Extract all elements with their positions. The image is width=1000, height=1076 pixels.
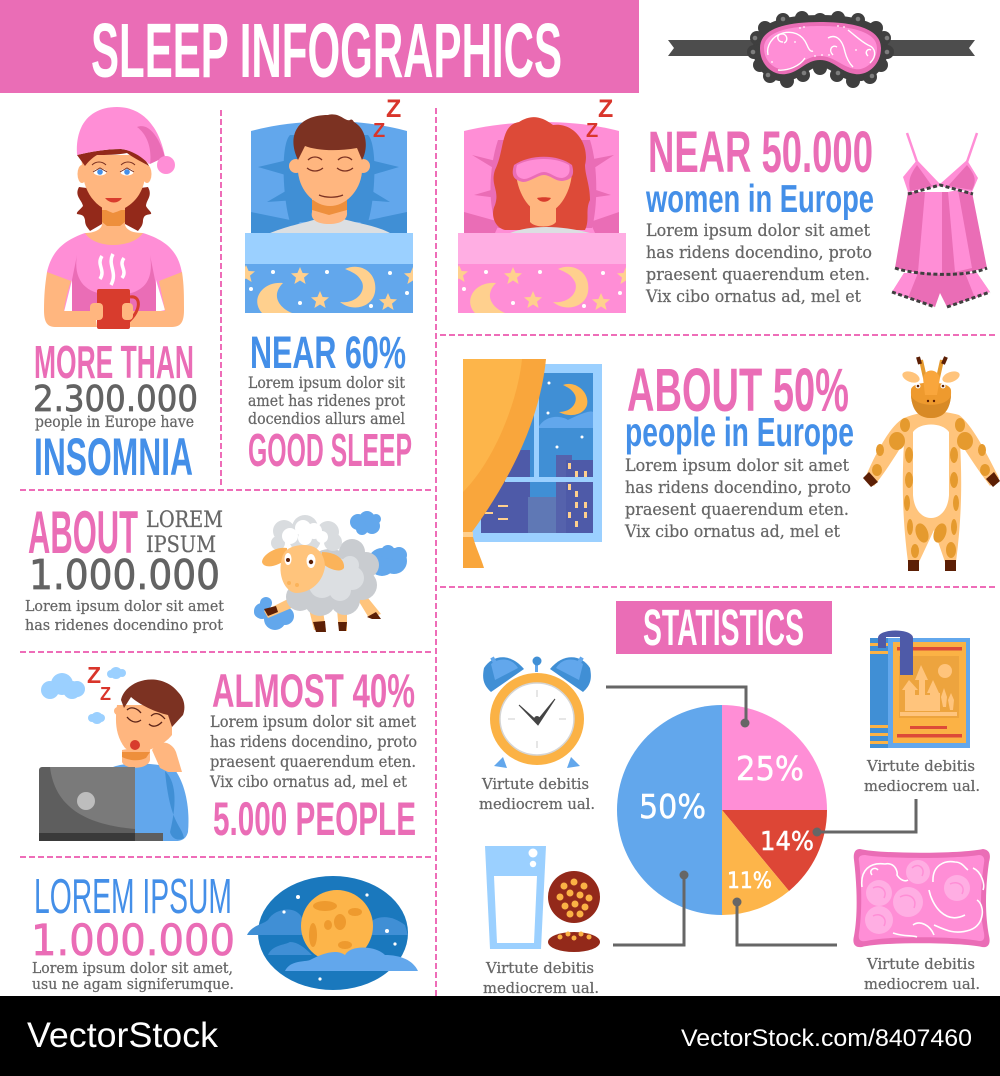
heading: about: ABOUT (28, 499, 138, 566)
label: 14%: 14% (760, 827, 814, 857)
title banner: SLEEP INFOGRAPHICS (91, 8, 562, 94)
text: description: Lorem ipsum dolor sit amet (646, 221, 870, 240)
text: description: praesent quaerendum eten. (646, 265, 870, 284)
panel: near 50.000 women (450, 95, 990, 313)
text: pillow label: mediocrem ual. (864, 977, 980, 993)
number: 1.000.000: 1.000.000 (29, 551, 220, 599)
icon: sheep with clouds (254, 511, 407, 632)
text: lorem ipsum: LOREM (146, 508, 223, 533)
text: description (624, 456, 851, 541)
number: 1.000.000: 1.000.000 (31, 916, 235, 966)
text: milk label: mediocrem ual. (483, 981, 599, 997)
label: 25%: 25% (736, 749, 804, 788)
icon: man sleeping in bed (245, 100, 413, 313)
text: description: has ridens docendino, proto (625, 478, 851, 497)
text: description: praesent quaerendum eten. (625, 500, 849, 519)
icon: giraffe onesie (863, 357, 1000, 571)
icon: man sleeping in bed: Z (373, 120, 385, 142)
text: lorem ipsum (146, 508, 223, 558)
text: lorem ipsum: amet has ridenes prot (248, 392, 406, 410)
footer watermark bar: VectorStock (27, 1016, 219, 1055)
icon: window with curtain (463, 359, 602, 568)
connector: pillow to 11% (732, 898, 837, 945)
text: description: Lorem ipsum dolor sit amet, (32, 961, 233, 977)
text: book label (864, 759, 980, 795)
icon: pink pillow (853, 849, 990, 947)
footer watermark bar (0, 996, 1000, 1076)
text: book label: mediocrem ual. (864, 779, 980, 795)
icon: alarm clock (483, 656, 591, 768)
subheading: women in europe: women in Europe (645, 178, 874, 221)
text: clock label: mediocrem ual. (479, 797, 595, 813)
icon: milk and cookies (485, 846, 600, 952)
icon: moon in night sky (247, 876, 418, 990)
text: clock label (479, 777, 595, 813)
panel: more than 2.300.000 insomnia (33, 107, 198, 487)
text: description: has ridens docendino, proto (646, 243, 872, 262)
icon: sleep mask on ribbon (668, 11, 975, 88)
text: description (25, 597, 224, 634)
icon: tired man with laptop: Z (100, 684, 111, 704)
text: description: praesent quaerendum eten. (210, 753, 416, 771)
subheading: people in europe: people in Europe (625, 409, 854, 455)
text: description: Lorem ipsum dolor sit amet (25, 597, 224, 615)
text: lorem ipsum (248, 374, 406, 428)
panel: about 50% people in europe (463, 356, 1000, 571)
panel: statistics (479, 599, 990, 997)
connector: milk to 50% (613, 870, 688, 945)
icon: woman sleeping with mask (458, 100, 626, 313)
text: description: Vix cibo ornatus ad, mel et (624, 522, 840, 541)
text: people in europe have: people in Europe have (35, 413, 194, 431)
heading: lorem ipsum: LOREM IPSUM (34, 870, 232, 924)
heading: almost 40%: ALMOST 40% (212, 664, 415, 717)
title banner (0, 0, 639, 94)
text: milk label (483, 961, 599, 997)
heading: statistics: STATISTICS (643, 599, 804, 656)
pie chart (617, 705, 827, 915)
text: book label: Virtute debitis (866, 759, 975, 775)
panel: almost 40% 5.000 people (39, 662, 417, 845)
text: pillow label (864, 957, 980, 993)
heading: good sleep: GOOD SLEEP (248, 424, 412, 476)
label: 11%: 11% (727, 869, 772, 894)
label: 50%: 50% (639, 787, 706, 826)
panel: near 60% good sleep (245, 100, 413, 466)
text: pillow label: Virtute debitis (866, 957, 975, 973)
text: description: Lorem ipsum dolor sit amet (625, 456, 849, 475)
icon: pink nightie (892, 133, 990, 307)
icon: woman sleeping with mask: Z (598, 95, 613, 123)
heading: statistics (616, 599, 832, 656)
heading: insomnia: INSOMNIA (34, 428, 193, 487)
icon: man sleeping in bed: Z (386, 95, 401, 123)
icon: woman sleeping with mask: Z (586, 120, 598, 142)
heading: more than: MORE THAN (34, 336, 194, 388)
heading: near 50.000: NEAR 50.000 (648, 120, 873, 185)
icon: tired man with laptop: Z (87, 662, 101, 688)
heading: near 60%: NEAR 60% (250, 327, 406, 378)
text: description (645, 221, 872, 306)
text: lorem ipsum: IPSUM (146, 533, 216, 558)
heading: about 50%: ABOUT 50% (627, 356, 849, 424)
text: description: Vix cibo ornatus ad, mel et (645, 287, 861, 306)
text: description: Vix cibo ornatus ad, mel et (209, 773, 408, 791)
text: clock label: Virtute debitis (481, 777, 589, 793)
icon: tired man with laptop (39, 662, 188, 841)
text: description: usu ne agam signiferumque. (32, 977, 234, 993)
connector: clock to 25% (606, 687, 750, 728)
icon: woman with mug (44, 107, 184, 329)
connector: book to 14% (812, 799, 916, 836)
icon: book (870, 630, 970, 748)
panel: lorem ipsum 1.000.000 (31, 870, 418, 993)
text: lorem ipsum: docendios allurs amel (248, 410, 405, 428)
text: milk label: Virtute debitis (485, 961, 594, 977)
panel: about 1.000.000 (25, 499, 407, 634)
text: description: has ridens docendino, proto (210, 733, 417, 751)
text: description (32, 961, 234, 993)
text: description: has ridenes docendino prot (25, 616, 223, 634)
text: description (209, 713, 417, 791)
text: lorem ipsum: Lorem ipsum dolor sit (248, 374, 406, 392)
number: 2.300.000: 2.300.000 (33, 379, 198, 420)
footer watermark bar: VectorStock.com/8407460 (681, 1025, 972, 1052)
text: description: Lorem ipsum dolor sit amet (210, 713, 417, 731)
heading: 5.000 people: 5.000 PEOPLE (213, 792, 416, 845)
